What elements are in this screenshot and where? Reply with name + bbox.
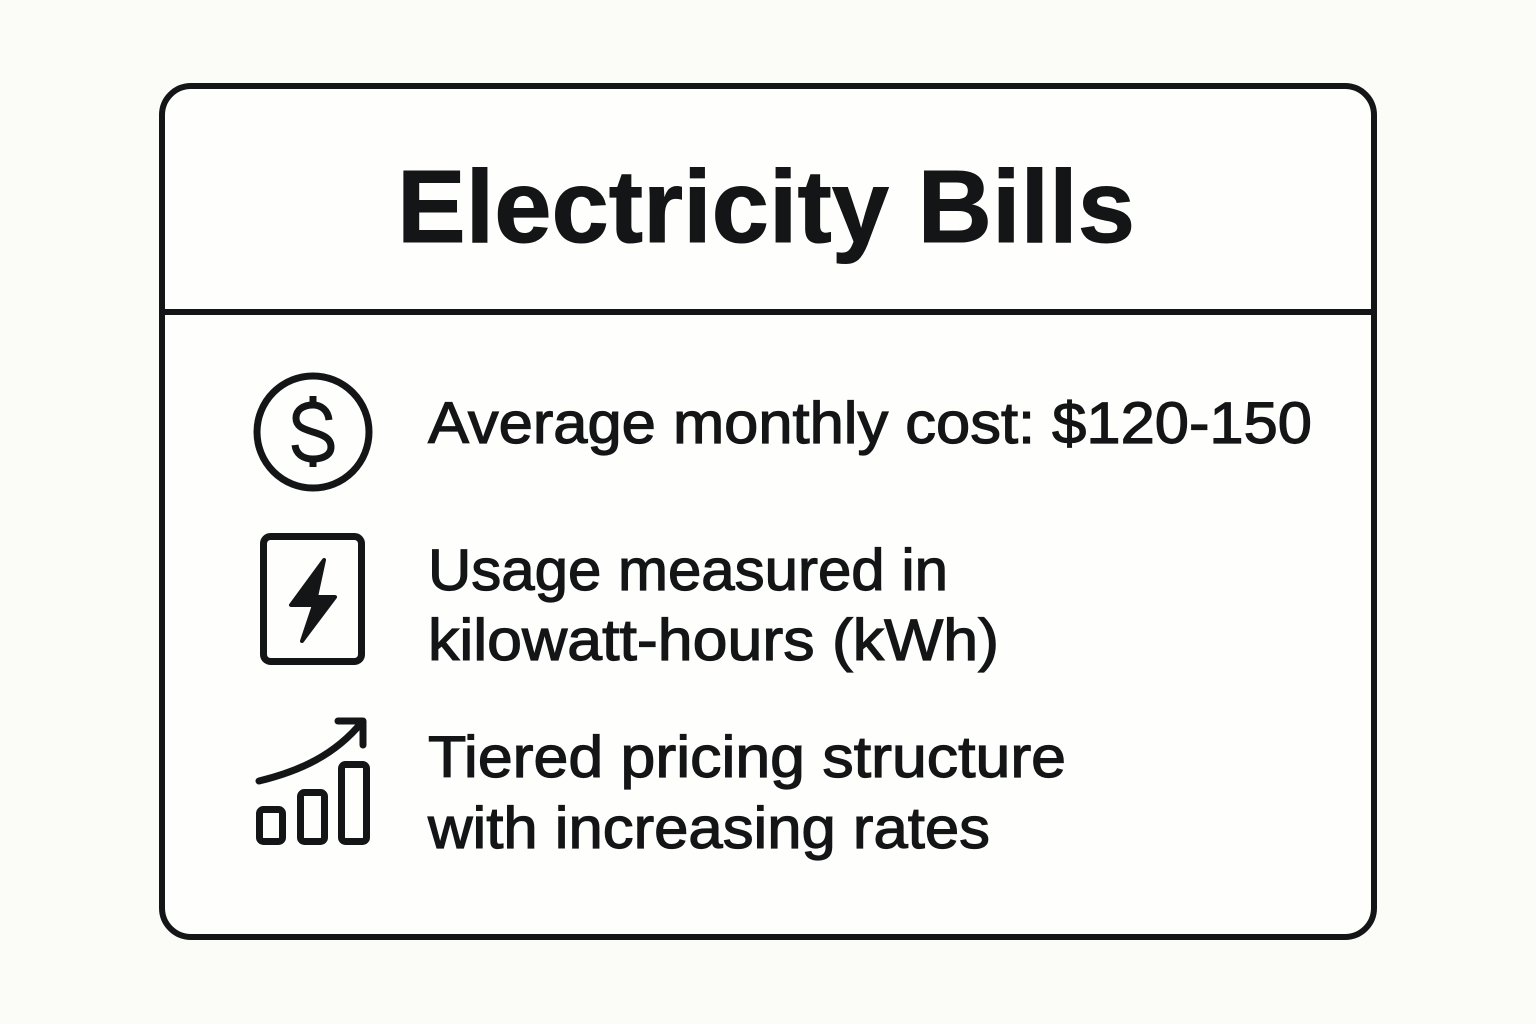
text: usage measured: Usage measured in <box>428 538 948 603</box>
panel: electricity bills card <box>162 86 1374 937</box>
text: kilowatt-hours: kilowatt-hours (kWh) <box>428 608 999 673</box>
text: average monthly cost: Average monthly cost: $120-150 <box>428 391 1312 456</box>
text: tiered pricing: Tiered pricing structure <box>428 725 1066 790</box>
icon: rising bar chart with arrow <box>259 721 366 842</box>
icon: dollar coin <box>257 376 369 488</box>
title: Electricity Bills <box>397 149 1135 264</box>
text: increasing rates: with increasing rates <box>427 796 990 861</box>
icon: lightning bolt meter <box>264 536 362 662</box>
